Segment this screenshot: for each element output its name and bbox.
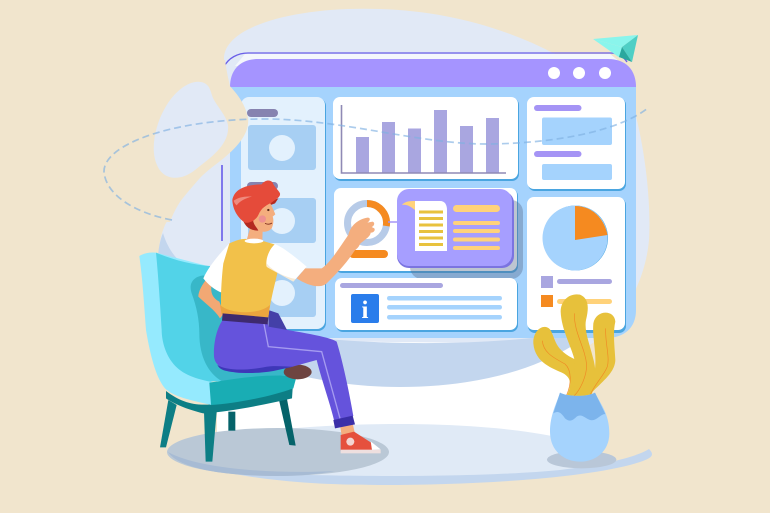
belt [222,313,268,324]
chair cushion [191,275,297,381]
ankle [340,423,355,436]
hair [232,181,280,223]
neck [247,228,263,241]
sleeve shade [267,263,296,282]
trouser cuff [333,416,355,428]
back sleeve [203,243,229,293]
trouser shade [217,365,293,373]
header dots [548,67,611,79]
far shoe [284,365,312,379]
arm [297,235,355,286]
vase [550,393,609,462]
beige cut-out [100,60,248,222]
window [230,59,636,338]
legend [541,276,612,307]
leaf veins [542,313,608,396]
face [253,203,275,232]
bars [356,110,499,173]
paper plane [593,35,638,62]
chair [139,252,297,462]
hand [343,218,375,253]
trousers [214,320,353,420]
cheek [259,215,266,223]
pie card [527,197,626,333]
plant [533,294,616,468]
donut card [334,188,518,273]
chart axes [342,105,506,173]
chair base [166,388,293,413]
pie chart [542,206,608,270]
bar chart card [333,97,519,181]
chair shadow [167,428,389,476]
left window line [221,165,223,241]
donut chart [348,203,387,242]
white strip above window [235,54,625,66]
front sleeve [266,244,307,282]
info card [335,278,518,332]
popup shadow [410,200,523,279]
vase glaze [553,393,605,421]
chair legs [160,397,296,462]
chair back outer [139,252,212,405]
floor band [215,449,652,485]
pale left lobe [154,82,228,178]
trouser stripe [264,324,340,418]
shoe [341,432,381,453]
white floor area [217,340,600,445]
top right card [527,97,626,191]
window body [230,87,636,338]
vest [221,239,277,317]
person [198,181,381,453]
eye [267,209,269,211]
floor ellipse [168,424,615,480]
info icon [351,294,379,324]
mouth [265,223,272,224]
darker blue blob [158,233,600,387]
pale background blob [159,9,649,380]
info icon: i [362,297,369,324]
collar [245,239,263,243]
back arm [198,277,224,318]
chair seat [209,375,297,405]
chair back front [156,253,297,382]
document icon [402,201,447,251]
far thigh [268,310,287,331]
vest hem [220,305,270,317]
hair highlight [234,196,252,205]
hair underside [242,198,278,231]
leaves [533,294,615,397]
popup panel [397,189,514,268]
left panel [241,97,326,331]
dashed orbit [104,108,648,220]
window outline [224,53,627,67]
vase shadow [547,451,616,468]
window header [230,59,636,87]
